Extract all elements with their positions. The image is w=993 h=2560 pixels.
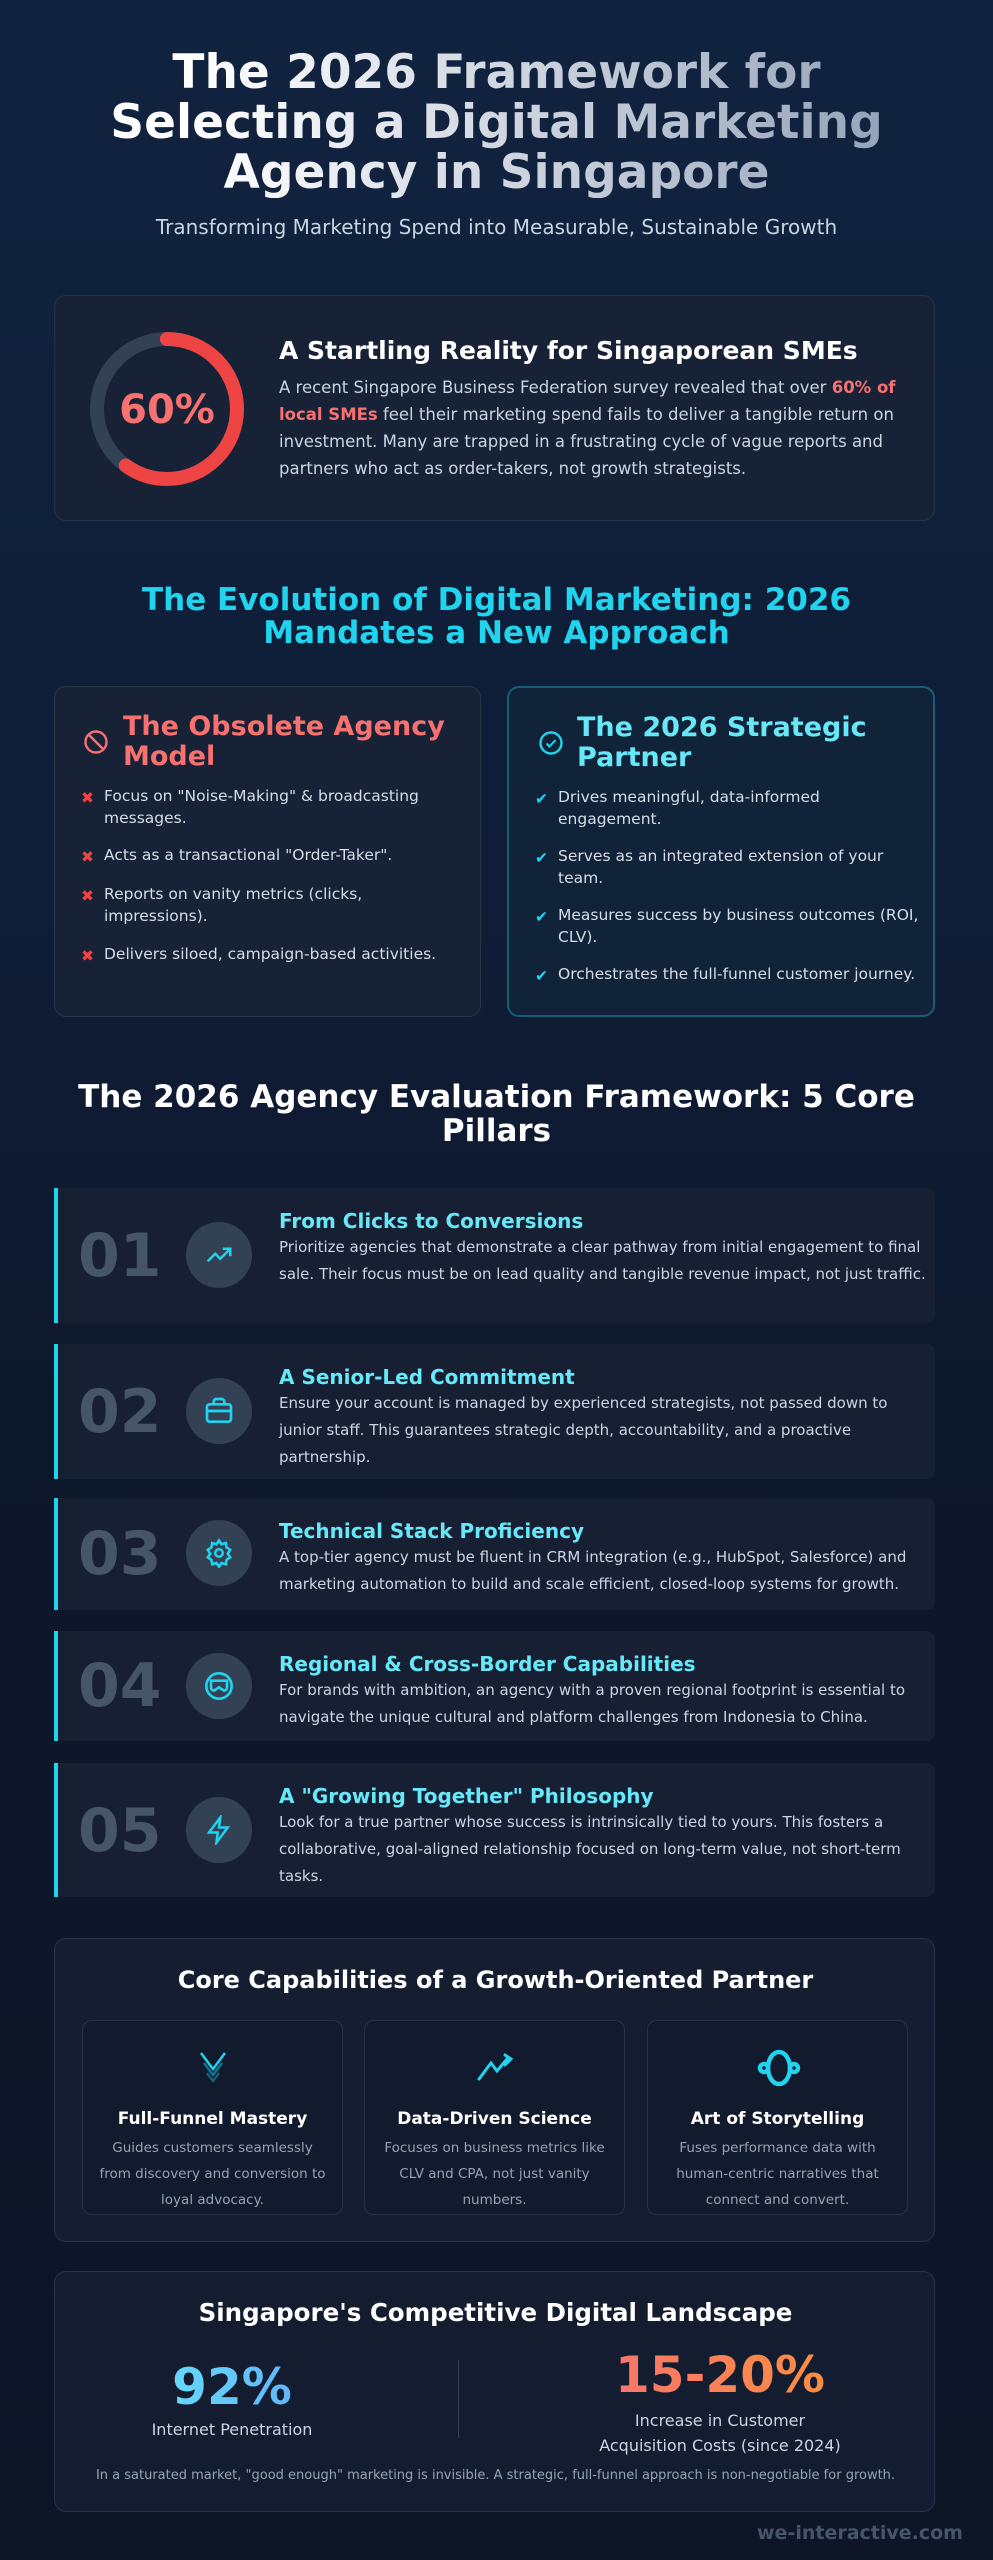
heading: evolution: The Evolution of Digital Marketing: 2026	[142, 582, 851, 618]
pillar 04: 04	[78, 1651, 162, 1721]
pillar 01: Prioritize agencies that demonstrate a clear pathway from initial engagement to final sale. Their focus must be on lead quality and tangible revenue impact, not just traffic.	[279, 1238, 926, 1283]
stat: 15-20%: Acquisition Costs (since 2024)	[599, 2436, 841, 2455]
icon: prohibited	[84, 730, 108, 754]
list: ✔	[535, 908, 548, 926]
panel: strategic partner	[507, 686, 935, 1017]
list: Focus on "Noise-Making" & broadcasting messages.	[104, 787, 419, 827]
heading: evolution: Mandates a New Approach	[263, 615, 730, 651]
list: Orchestrates the full-funnel customer journey.	[558, 965, 915, 983]
pillar 04	[54, 1631, 935, 1741]
capability: storytelling	[647, 2020, 908, 2215]
donut chart 60%: 60%	[119, 387, 215, 433]
footnote: In a saturated market, "good enough" marketing is invisible. A strategic, full-funnel approach is non-negotiable for growth.	[96, 2468, 895, 2483]
capability: full funnel: Full-Funnel Mastery	[118, 2109, 307, 2129]
capability: data-driven: Data-Driven Science	[397, 2109, 592, 2129]
pillar 03: A top-tier agency must be fluent in CRM integration (e.g., HubSpot, Salesforce) and marketing automation to build and scale efficient, closed-loop systems for growth.	[279, 1548, 906, 1593]
body text: A recent Singapore Business Federation survey revealed that over 60% of local SMEs feel their marketing spend fails to deliver a tangible return on investment. Many are trapped in a frustrating cycle of vague reports and partners who act as order-takers, not growth strategists.	[279, 378, 895, 478]
stat: 92%	[152, 2358, 312, 2439]
list: Acts as a transactional "Order-Taker".	[104, 846, 392, 864]
pillar 05	[54, 1763, 935, 1897]
panel: competitive landscape	[54, 2271, 935, 2512]
capability: data-driven: Focuses on business metrics like CLV and CPA, not just vanity numbers.	[384, 2140, 605, 2208]
pillar 04: Regional & Cross-Border Capabilities	[279, 1652, 696, 1676]
title	[0, 48, 993, 198]
capability: full funnel: Guides customers seamlessly from discovery and conversion to loyal advocacy.	[99, 2140, 326, 2208]
heading: The 2026 Strategic	[577, 712, 867, 743]
list: ✖	[81, 947, 94, 965]
stat: 92%: 92%	[172, 2358, 292, 2416]
pillar 02: Ensure your account is managed by experienced strategists, not passed down to junior staff. This guarantees strategic depth, accountability, and a proactive partnership.	[279, 1394, 887, 1466]
heading: 5 pillars: The 2026 Agency Evaluation Framework: 5 Core	[78, 1079, 915, 1115]
stat: 15-20%: 15-20%	[615, 2346, 825, 2404]
list: Reports on vanity metrics (clicks, impressions).	[104, 885, 362, 925]
panel: obsolete model	[54, 686, 481, 1017]
heading: Singapore's Competitive Digital Landscape	[199, 2298, 792, 2327]
pillar 02: A Senior-Led Commitment	[279, 1365, 575, 1389]
title: The 2026 Framework for	[172, 45, 821, 100]
pillar 03: 03	[78, 1519, 162, 1589]
watermark: we-interactive.com	[757, 2522, 963, 2544]
stat: 92%: Internet Penetration	[152, 2420, 312, 2439]
heading: 5 pillars	[78, 1079, 915, 1149]
heading	[577, 712, 867, 773]
pillar 02: 02	[78, 1377, 162, 1447]
list: ✔	[535, 967, 548, 985]
list: Drives meaningful, data-informed engagement.	[558, 788, 820, 828]
capability: storytelling: Fuses performance data with human-centric narratives that connect and convert.	[676, 2140, 879, 2208]
capability: full funnel	[82, 2020, 343, 2215]
list: ✖	[81, 887, 94, 905]
heading: A Startling Reality for Singaporean SMEs	[279, 336, 858, 365]
pillar 02	[54, 1344, 935, 1479]
pillar 01: 01	[78, 1221, 162, 1291]
pillar 03	[54, 1498, 935, 1610]
heading: Core Capabilities of a Growth-Oriented Partner	[178, 1966, 813, 1994]
icon: globe	[186, 1653, 252, 1719]
list: ✔	[535, 790, 548, 808]
capability: storytelling: Art of Storytelling	[691, 2109, 864, 2129]
pillar 04: For brands with ambition, an agency with a proven regional footprint is essential to navigate the unique cultural and platform challenges from Indonesia to China.	[279, 1681, 905, 1726]
pillar 03: Technical Stack Proficiency	[279, 1519, 584, 1543]
list: ✔	[535, 849, 548, 867]
icon: check circle	[539, 731, 563, 755]
title: Selecting a Digital Marketing	[110, 95, 883, 150]
icon: gear	[186, 1520, 252, 1586]
icon: briefcase	[186, 1378, 252, 1444]
heading: The Obsolete Agency	[123, 711, 445, 742]
stat: 15-20%: Increase in Customer	[635, 2411, 805, 2430]
panel: core capabilities	[54, 1938, 935, 2242]
donut chart 60%	[90, 332, 244, 486]
pillar 01	[54, 1188, 935, 1323]
list: Delivers siloed, campaign-based activities.	[104, 945, 436, 963]
heading: 5 pillars: Pillars	[442, 1113, 551, 1149]
pillar 05: 05	[78, 1796, 162, 1866]
list	[535, 788, 918, 985]
pillar 05: A "Growing Together" Philosophy	[279, 1784, 654, 1808]
heading: evolution	[142, 582, 851, 651]
title: Agency in Singapore	[224, 145, 769, 200]
stat: 15-20%	[599, 2346, 841, 2455]
list: Serves as an integrated extension of your team.	[558, 847, 883, 887]
heading	[123, 711, 445, 772]
list	[81, 787, 436, 965]
pillar 01: From Clicks to Conversions	[279, 1209, 583, 1233]
icon: lightning	[186, 1797, 252, 1863]
list: Measures success by business outcomes (ROI, CLV).	[558, 906, 918, 946]
capability: data-driven	[364, 2020, 625, 2215]
heading: Model	[123, 741, 215, 772]
icon: trending up	[186, 1222, 252, 1288]
subtitle: Transforming Marketing Spend into Measurable, Sustainable Growth	[156, 215, 837, 239]
heading: Partner	[577, 742, 691, 773]
list: ✖	[81, 789, 94, 807]
pillar 05: Look for a true partner whose success is intrinsically tied to yours. This fosters a collaborative, goal-aligned relationship focused on long-term value, not short-term tasks.	[279, 1813, 901, 1885]
list: ✖	[81, 848, 94, 866]
panel: startling reality	[54, 295, 935, 521]
